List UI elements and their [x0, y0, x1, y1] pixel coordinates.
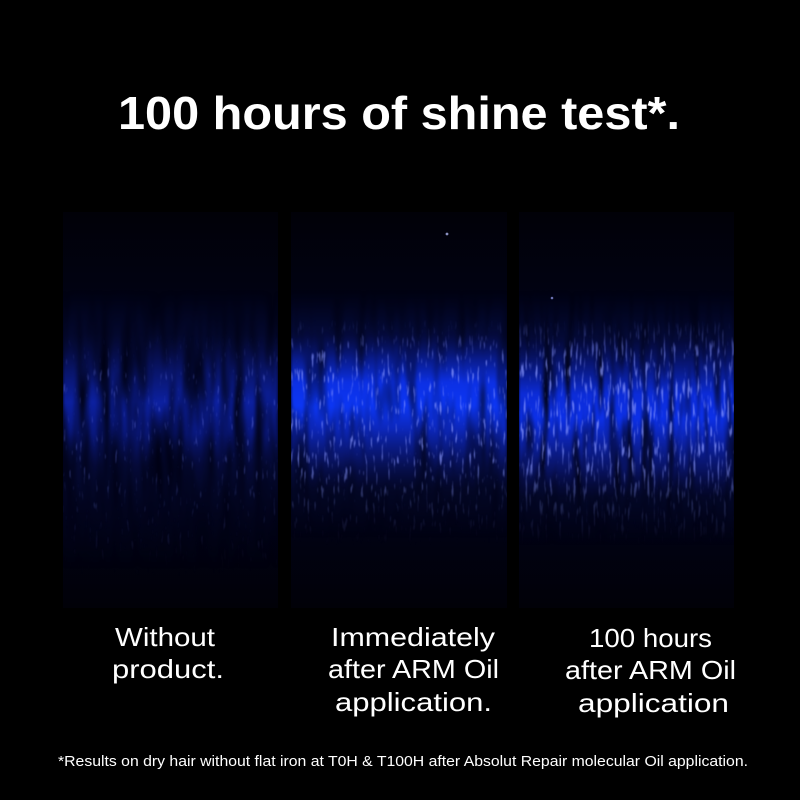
label: without product	[112, 622, 224, 684]
label: 100 hours after ARM Oil application: application	[578, 688, 729, 718]
label: immediately after ARM Oil application: after ARM Oil	[328, 654, 499, 684]
label: 100 hours after ARM Oil application	[565, 623, 736, 718]
label: without product: product.	[112, 654, 224, 684]
panel: immediately after application	[291, 212, 507, 608]
title: 100 hours of shine test*.	[118, 87, 680, 139]
footnote: *Results on dry hair without flat iron at T0H & T100H after Absolut Repair molecular Oil application.	[58, 754, 748, 770]
panel: 100 hours after application	[519, 212, 734, 608]
label: immediately after ARM Oil application: Immediately	[331, 622, 495, 652]
label: 100 hours after ARM Oil application: 100 hours	[589, 623, 712, 653]
label: 100 hours after ARM Oil application: after ARM Oil	[565, 655, 736, 685]
label: immediately after ARM Oil application: application.	[335, 687, 492, 717]
label: without product: Without	[115, 622, 216, 652]
label: immediately after ARM Oil application	[328, 622, 499, 717]
panel: without product	[63, 212, 278, 608]
